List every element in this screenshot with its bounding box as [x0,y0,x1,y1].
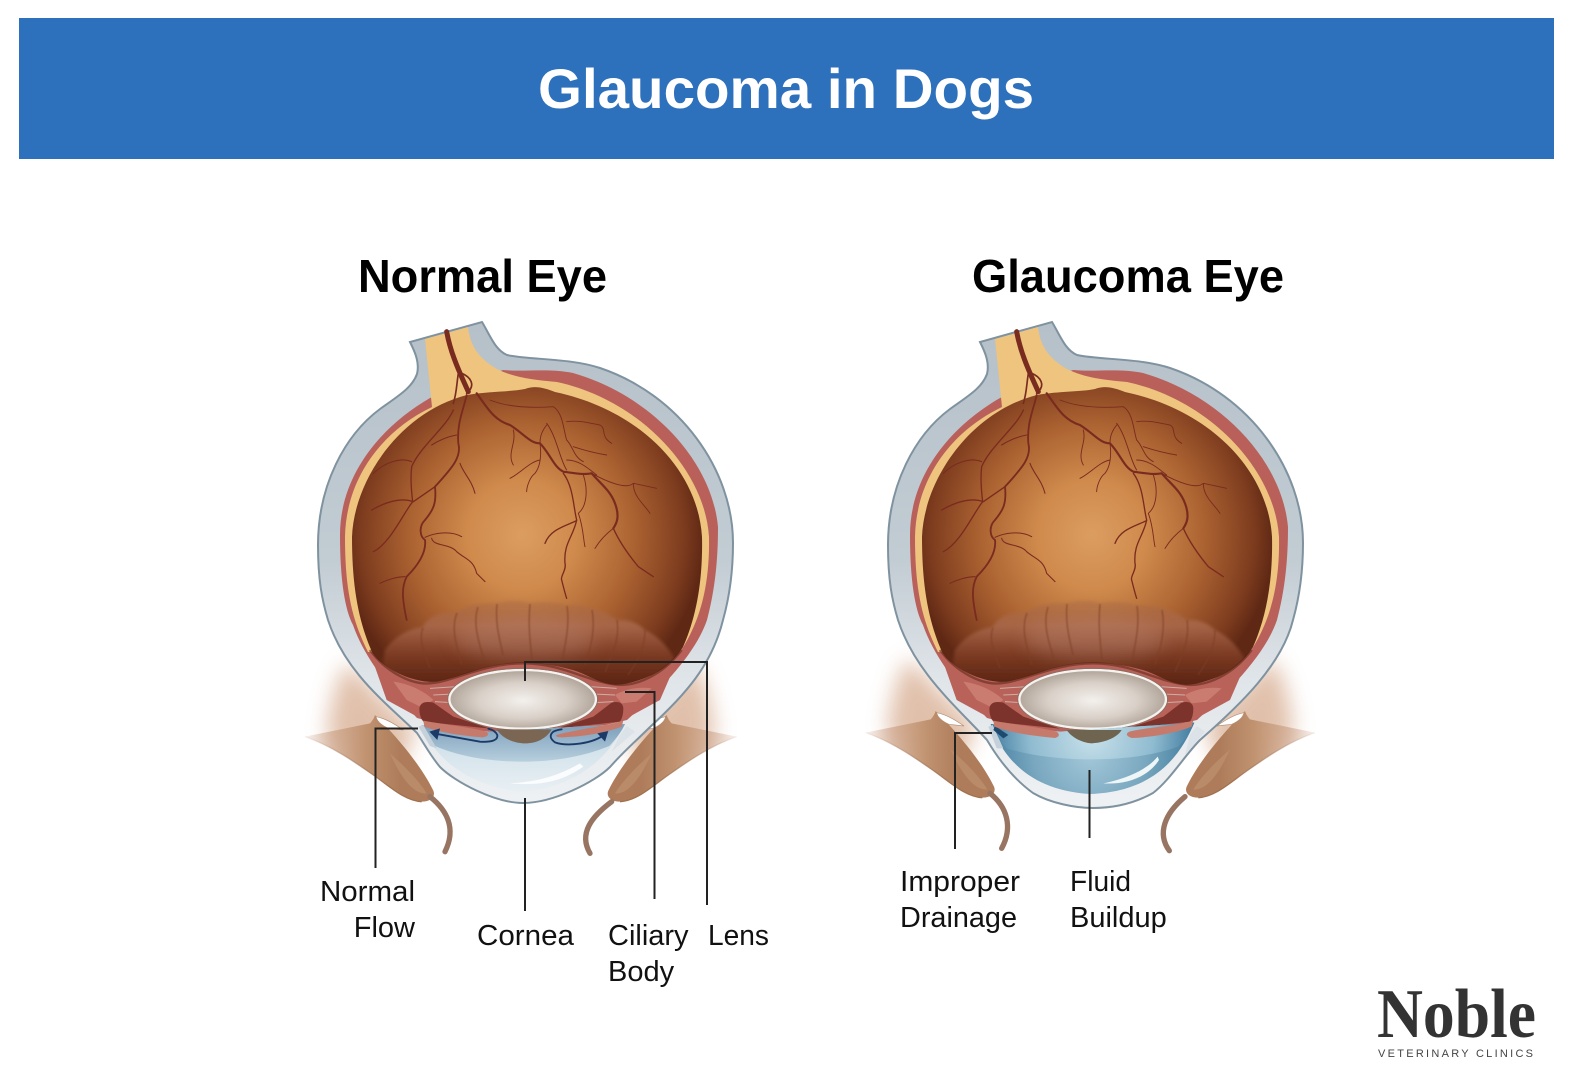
label: lens: Lens [708,920,769,952]
diagram: glaucoma eye [866,322,1315,851]
label: ciliary body: Ciliary [608,920,689,952]
label: fluid buildup: Buildup [1070,902,1167,934]
label: improper drainage [900,866,1020,934]
sclera [318,322,733,803]
iris [423,721,488,737]
sclera [888,322,1303,808]
callout lines: normal eye [376,662,707,911]
heading: glaucoma eye: Glaucoma Eye [972,250,1284,302]
label: cornea: Cornea [477,920,575,952]
diagram: normal eye [305,322,737,853]
iris [993,721,1059,738]
flow arrows [433,729,605,744]
heading: normal eye: Normal Eye [358,250,607,302]
label: improper drainage: Improper [900,866,1020,898]
aqueous chamber [991,723,1194,794]
label: fluid buildup [1070,866,1167,934]
label: ciliary body: Body [608,956,675,988]
logo: Noble Veterinary Clinics: VETERINARY CLINICS [1378,1048,1533,1060]
label: normal flow [320,876,416,944]
logo: Noble Veterinary Clinics: Noble [1377,976,1536,1053]
title: Glaucoma in Dogs [538,57,1034,120]
label: improper drainage: Drainage [900,902,1017,934]
callout lines: glaucoma eye [955,733,1090,849]
aqueous chamber [422,724,625,793]
label: normal flow: Flow [354,912,416,944]
header banner [19,18,1554,159]
label: fluid buildup: Fluid [1070,866,1131,898]
label: normal flow: Normal [320,876,415,908]
label: ciliary body [608,920,689,988]
